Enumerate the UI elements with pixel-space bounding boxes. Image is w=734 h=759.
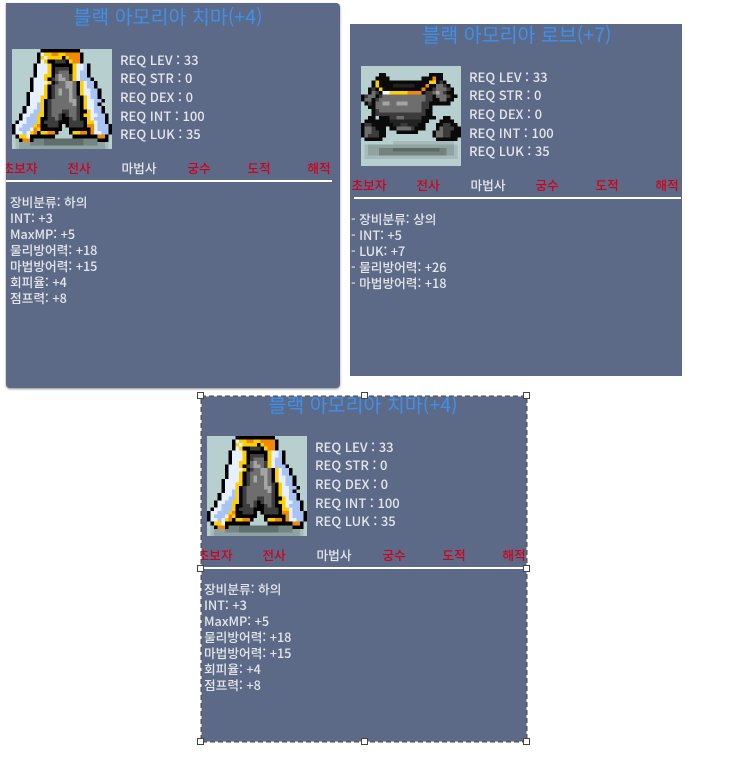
requirements: REQ DEX : 0 bbox=[469, 104, 542, 123]
item stats: - LUK: +7 bbox=[351, 241, 405, 260]
classes: 마법사 bbox=[121, 158, 157, 176]
icon: robe sprite bbox=[361, 66, 461, 166]
item stats: 점프력: +8 bbox=[10, 288, 67, 307]
classes: 전사 bbox=[262, 544, 286, 564]
selection frame with handles bbox=[197, 392, 530, 745]
requirements: REQ LEV : 33 bbox=[315, 436, 394, 456]
icon: skirt sprite bbox=[207, 436, 307, 536]
item stats: 물리방어력: +18 bbox=[10, 240, 97, 259]
classes bbox=[6, 158, 331, 176]
item stats bbox=[10, 192, 97, 307]
classes bbox=[201, 544, 526, 564]
requirements: REQ STR : 0 bbox=[120, 68, 192, 87]
item stats: 마법방어력: +15 bbox=[10, 256, 97, 275]
requirements: REQ STR : 0 bbox=[469, 85, 541, 104]
classes: 전사 bbox=[67, 158, 91, 176]
classes: 도적 bbox=[442, 544, 466, 564]
classes: 궁수 bbox=[535, 174, 559, 194]
item stats: - 장비분류: 상의 bbox=[351, 209, 436, 228]
requirements: REQ LUK : 35 bbox=[469, 141, 550, 160]
item stats: - 마법방어력: +18 bbox=[351, 273, 446, 292]
panel: item card black amoria skirt +4 bbox=[6, 3, 340, 388]
requirements: REQ DEX : 0 bbox=[120, 87, 193, 106]
classes: 마법사 bbox=[470, 174, 506, 194]
item stats: - 물리방어력: +26 bbox=[351, 257, 446, 276]
item stats: 물리방어력: +18 bbox=[204, 627, 291, 646]
item stats: 점프력: +8 bbox=[204, 675, 261, 694]
requirements: REQ LUK : 35 bbox=[315, 511, 396, 530]
item stats: 회피율: +4 bbox=[204, 659, 261, 678]
item stats bbox=[204, 579, 291, 694]
item stats: 회피율: +4 bbox=[10, 272, 67, 291]
item stats: - INT: +5 bbox=[351, 225, 402, 244]
requirements bbox=[120, 50, 205, 143]
icon: skirt sprite bbox=[12, 49, 112, 149]
requirements: REQ STR : 0 bbox=[315, 455, 387, 474]
item stats: INT: +3 bbox=[204, 595, 247, 614]
classes: 궁수 bbox=[382, 544, 406, 564]
requirements bbox=[469, 66, 554, 160]
classes: 마법사 bbox=[316, 544, 352, 564]
requirements bbox=[315, 436, 400, 530]
requirements: REQ LEV : 33 bbox=[120, 50, 199, 68]
item stats: 마법방어력: +15 bbox=[204, 643, 291, 662]
classes: 도적 bbox=[247, 158, 271, 176]
classes: 해적 bbox=[502, 544, 526, 564]
panel: item card black amoria robe +7 bbox=[350, 24, 682, 376]
requirements: REQ INT : 100 bbox=[315, 493, 400, 512]
classes: 궁수 bbox=[187, 158, 211, 176]
item stats: MaxMP: +5 bbox=[204, 611, 269, 630]
panel: selected item card black amoria skirt +4 bbox=[201, 396, 527, 742]
requirements: REQ DEX : 0 bbox=[315, 474, 388, 493]
item stats: 장비분류: 하의 bbox=[10, 192, 87, 211]
requirements: REQ INT : 100 bbox=[120, 106, 205, 125]
classes: 도적 bbox=[595, 174, 619, 194]
requirements: REQ INT : 100 bbox=[469, 123, 554, 142]
item stats bbox=[351, 209, 446, 292]
requirements: REQ LUK : 35 bbox=[120, 124, 201, 143]
item stats: 장비분류: 하의 bbox=[204, 579, 281, 598]
classes bbox=[351, 174, 679, 194]
classes: 전사 bbox=[416, 174, 440, 194]
requirements: REQ LEV : 33 bbox=[469, 66, 548, 86]
item stats: INT: +3 bbox=[10, 208, 53, 227]
classes: 해적 bbox=[307, 158, 331, 176]
classes: 해적 bbox=[655, 174, 679, 194]
classes: 초보자 bbox=[351, 174, 387, 194]
item stats: MaxMP: +5 bbox=[10, 224, 75, 243]
